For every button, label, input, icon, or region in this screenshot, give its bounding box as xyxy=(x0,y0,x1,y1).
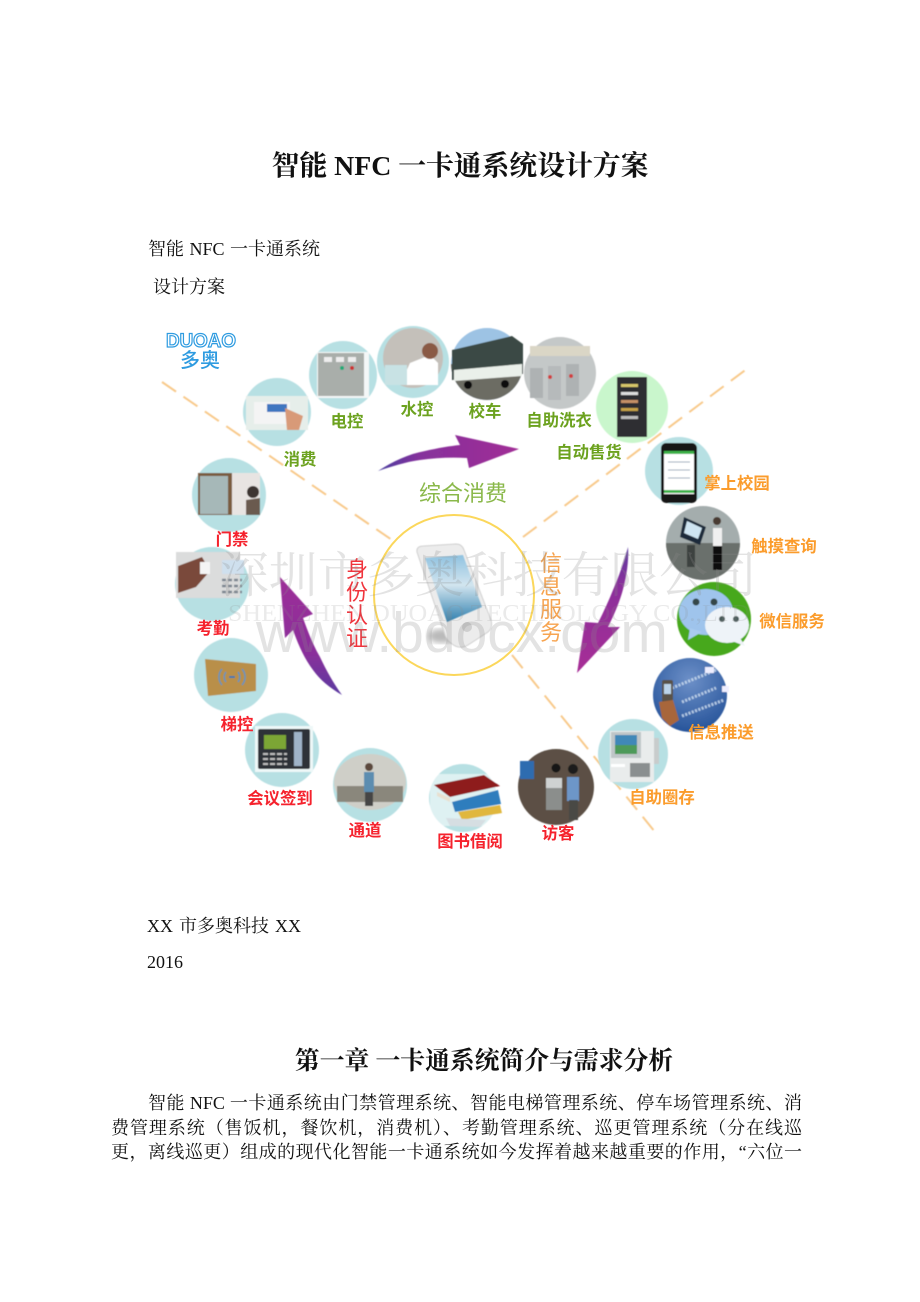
side text: information service xyxy=(540,551,562,645)
labels: 自助圈存 xyxy=(629,788,695,807)
labels: 校车 xyxy=(469,402,501,421)
labels: 访客 xyxy=(542,824,574,843)
icon: 自动售货 xyxy=(596,371,668,443)
labels: 门禁 xyxy=(216,531,248,549)
labels: 通道 xyxy=(349,821,381,840)
labels: 信息推送 xyxy=(688,723,754,742)
subtitle line 2: 设计方案 xyxy=(153,277,225,297)
icon: 通道 xyxy=(333,748,407,822)
labels xyxy=(197,400,825,851)
labels: 触摸查询 xyxy=(751,537,817,556)
labels: 微信服务 xyxy=(759,612,825,631)
icon: 信息推送 xyxy=(653,658,729,732)
icon: 访客 xyxy=(518,749,594,825)
side text: comprehensive consumption: 综合消费 xyxy=(419,481,507,506)
body paragraph: 费管理系统（售饭机，餐饮机，消费机）、考勤管理系统、巡更管理系统（分在线巡 xyxy=(111,1118,802,1138)
watermark: SHENZHEN DUOAO TECHNOLOGY CO.,LTD xyxy=(228,601,750,627)
icon: 触摸查询 xyxy=(666,506,740,580)
icon: 会议签到 xyxy=(245,713,319,787)
title: 智能 NFC 一卡通系统设计方案 xyxy=(272,151,648,182)
icon: 校车 xyxy=(451,328,523,400)
icon: 自助圈存 xyxy=(598,719,668,789)
labels: 掌上校园 xyxy=(704,474,770,493)
icon: 消费 xyxy=(243,378,311,446)
side text: information service: 服 xyxy=(540,597,562,622)
labels: 水控 xyxy=(401,400,433,419)
side text: identity xyxy=(346,557,368,651)
body paragraph: 智能 NFC 一卡通系统由门禁管理系统、智能电梯管理系统、停车场管理系统、消 xyxy=(148,1093,802,1113)
body paragraph: 更，离线巡更）组成的现代化智能一卡通系统如今发挥着越来越重要的作用，“六位一 xyxy=(111,1142,802,1162)
labels: 图书借阅 xyxy=(437,833,503,851)
logo xyxy=(166,331,236,372)
labels: 考勤 xyxy=(197,619,229,638)
side text: information service: 信 xyxy=(540,551,562,576)
side text: identity: 身 xyxy=(346,557,368,582)
logo: DUOAO xyxy=(166,331,236,352)
watermark xyxy=(220,549,757,665)
icon: 自助洗衣 xyxy=(524,337,596,409)
centre circle and phone xyxy=(374,515,534,675)
icon: 电控 xyxy=(309,341,377,409)
subtitle line 1: 智能 NFC 一卡通系统 xyxy=(148,239,320,259)
icon: 图书借阅 xyxy=(429,764,502,832)
company name: XX 市多奥科技 XX xyxy=(147,916,301,936)
chapter heading: 第一章 一卡通系统简介与需求分析 xyxy=(295,1048,673,1075)
icon: 掌上校园 xyxy=(645,437,713,505)
watermark: 深圳市多奥科技有限公司 xyxy=(220,549,757,603)
labels: 自动售货 xyxy=(556,443,622,462)
dashed dividers xyxy=(162,368,748,832)
side text: information service: 息 xyxy=(540,574,562,599)
labels: 会议签到 xyxy=(247,789,313,808)
side text: identity: 证 xyxy=(346,626,368,651)
arrow: information xyxy=(577,547,628,673)
side text: information service: 务 xyxy=(540,620,562,645)
arrow: consumption xyxy=(378,435,519,471)
icon: 梯控 xyxy=(194,638,268,712)
labels: 消费 xyxy=(284,451,316,469)
labels: 电控 xyxy=(331,412,363,431)
side text: identity: 认 xyxy=(346,603,368,628)
year: 2016 xyxy=(147,952,183,972)
labels: 梯控 xyxy=(221,715,253,734)
watermark: www.bdocx.com xyxy=(255,601,668,665)
logo: 多奥 xyxy=(180,349,220,372)
icon: 水控 xyxy=(377,326,449,398)
side text: identity: 份 xyxy=(346,580,368,605)
labels: 自助洗衣 xyxy=(526,411,592,430)
arrow: identity xyxy=(280,577,342,695)
icon: 微信服务 xyxy=(677,582,751,656)
icon: 门禁 xyxy=(192,458,266,532)
icon: 考勤 xyxy=(175,547,249,621)
